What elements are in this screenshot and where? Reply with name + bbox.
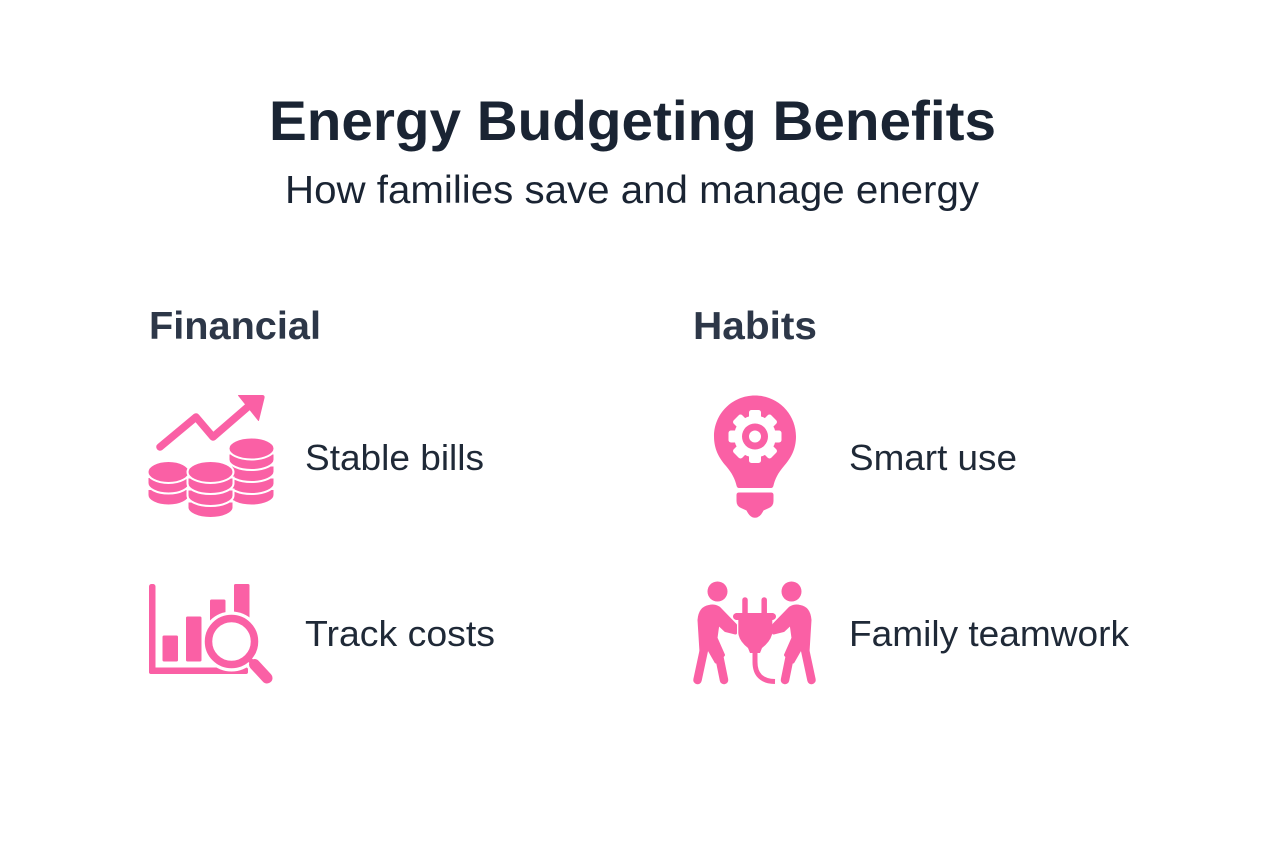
icon: two people holding a plug — [698, 582, 812, 682]
subtitle: How families save and manage energy — [285, 169, 980, 212]
heading: financial: Financial — [149, 305, 321, 348]
label: stable bills: Stable bills — [305, 437, 484, 478]
icon: bar chart with magnifier — [149, 584, 267, 678]
panel: habits — [693, 305, 1130, 682]
label: smart use: Smart use — [849, 437, 1017, 478]
heading: habits: Habits — [693, 305, 817, 348]
label: track costs: Track costs — [305, 613, 495, 654]
label: family teamwork: Family teamwork — [849, 613, 1130, 654]
title: Energy Budgeting Benefits — [269, 89, 996, 152]
icon: light bulb with gear — [714, 396, 796, 518]
panel: financial — [148, 305, 495, 678]
icon: rising arrow over coin stacks — [148, 396, 274, 518]
